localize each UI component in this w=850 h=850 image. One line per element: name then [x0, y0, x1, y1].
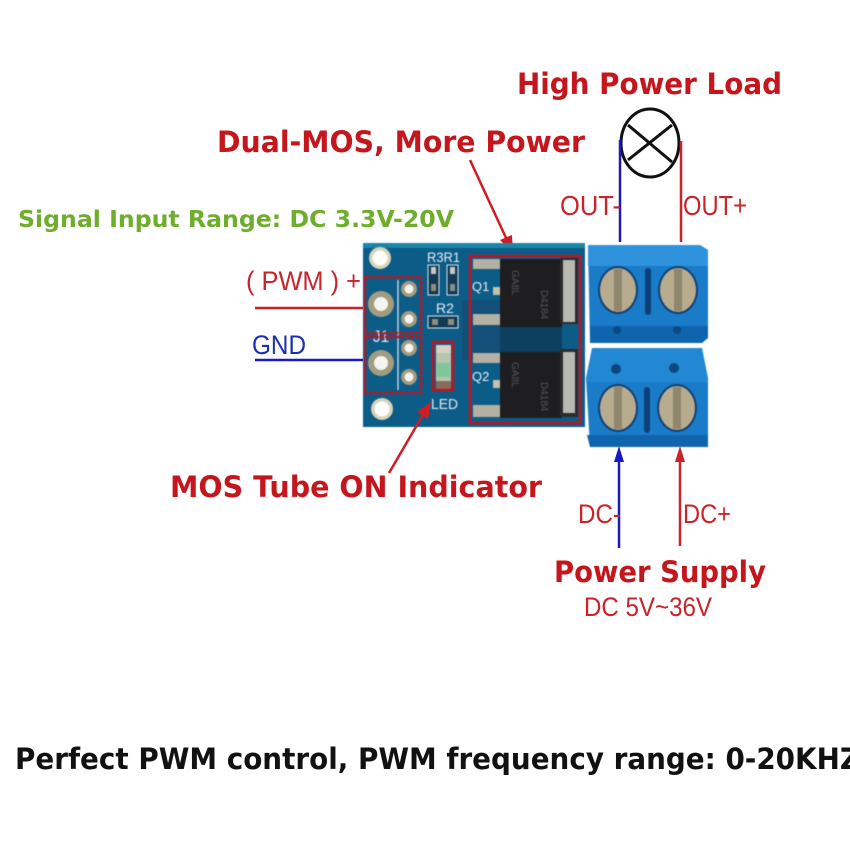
label: OUT plus: OUT+	[683, 190, 747, 221]
LED component	[431, 345, 458, 413]
resistor silkscreen and labels: R3R1	[427, 249, 460, 265]
GND wire	[255, 359, 363, 361]
label: DC plus: DC+	[683, 499, 731, 529]
heading: power supply: Power Supply	[554, 555, 766, 589]
LED component: LED	[431, 396, 458, 413]
lower input terminal block	[586, 348, 708, 447]
upper output terminal block	[588, 245, 708, 343]
red highlight frames	[365, 256, 580, 423]
load heading: High Power Load	[517, 67, 782, 101]
label: OUT minus: OUT-	[560, 190, 621, 221]
MOSFET Q2	[472, 349, 578, 418]
J1 silkscreen	[373, 280, 398, 390]
arrow: DC plus	[675, 446, 685, 546]
label: DC minus: DC-	[578, 499, 621, 529]
circuit board	[363, 243, 585, 427]
MOSFET Q1: Q1	[472, 279, 489, 294]
resistor silkscreen and labels: R2	[436, 300, 454, 316]
PWM wire	[255, 307, 363, 309]
MOSFET Q2: D4184	[538, 382, 549, 412]
icon: lamp load symbol	[621, 109, 679, 177]
label: GND: GND	[252, 330, 306, 360]
output negative wire	[619, 140, 621, 242]
output positive wire	[680, 141, 682, 242]
heading: dual MOS: Dual-MOS, More Power	[217, 125, 586, 159]
J1 header pads	[368, 281, 417, 385]
mounting holes	[369, 247, 393, 420]
MOSFET Q1: GA8L	[509, 270, 520, 296]
resistor silkscreen and labels	[427, 249, 460, 328]
MOSFET Q1	[472, 258, 578, 327]
arrow: DC minus	[614, 446, 624, 548]
MOSFET Q2: Q2	[472, 369, 489, 384]
heading: MOS tube indicator: MOS Tube ON Indicator	[170, 470, 543, 504]
label: supply voltage range: DC 5V~36V	[584, 592, 712, 622]
J1 silkscreen: J1	[373, 327, 389, 346]
label: PWM: ( PWM ) +	[246, 266, 361, 296]
label: signal input range: Signal Input Range: DC 3.3V-20V	[18, 207, 454, 233]
MOSFET Q2: GA8L	[509, 362, 520, 388]
arrow: indicator to LED	[389, 402, 431, 473]
MOSFET Q1: D4184	[538, 290, 549, 320]
arrow: dual MOS to transistors	[470, 160, 513, 253]
